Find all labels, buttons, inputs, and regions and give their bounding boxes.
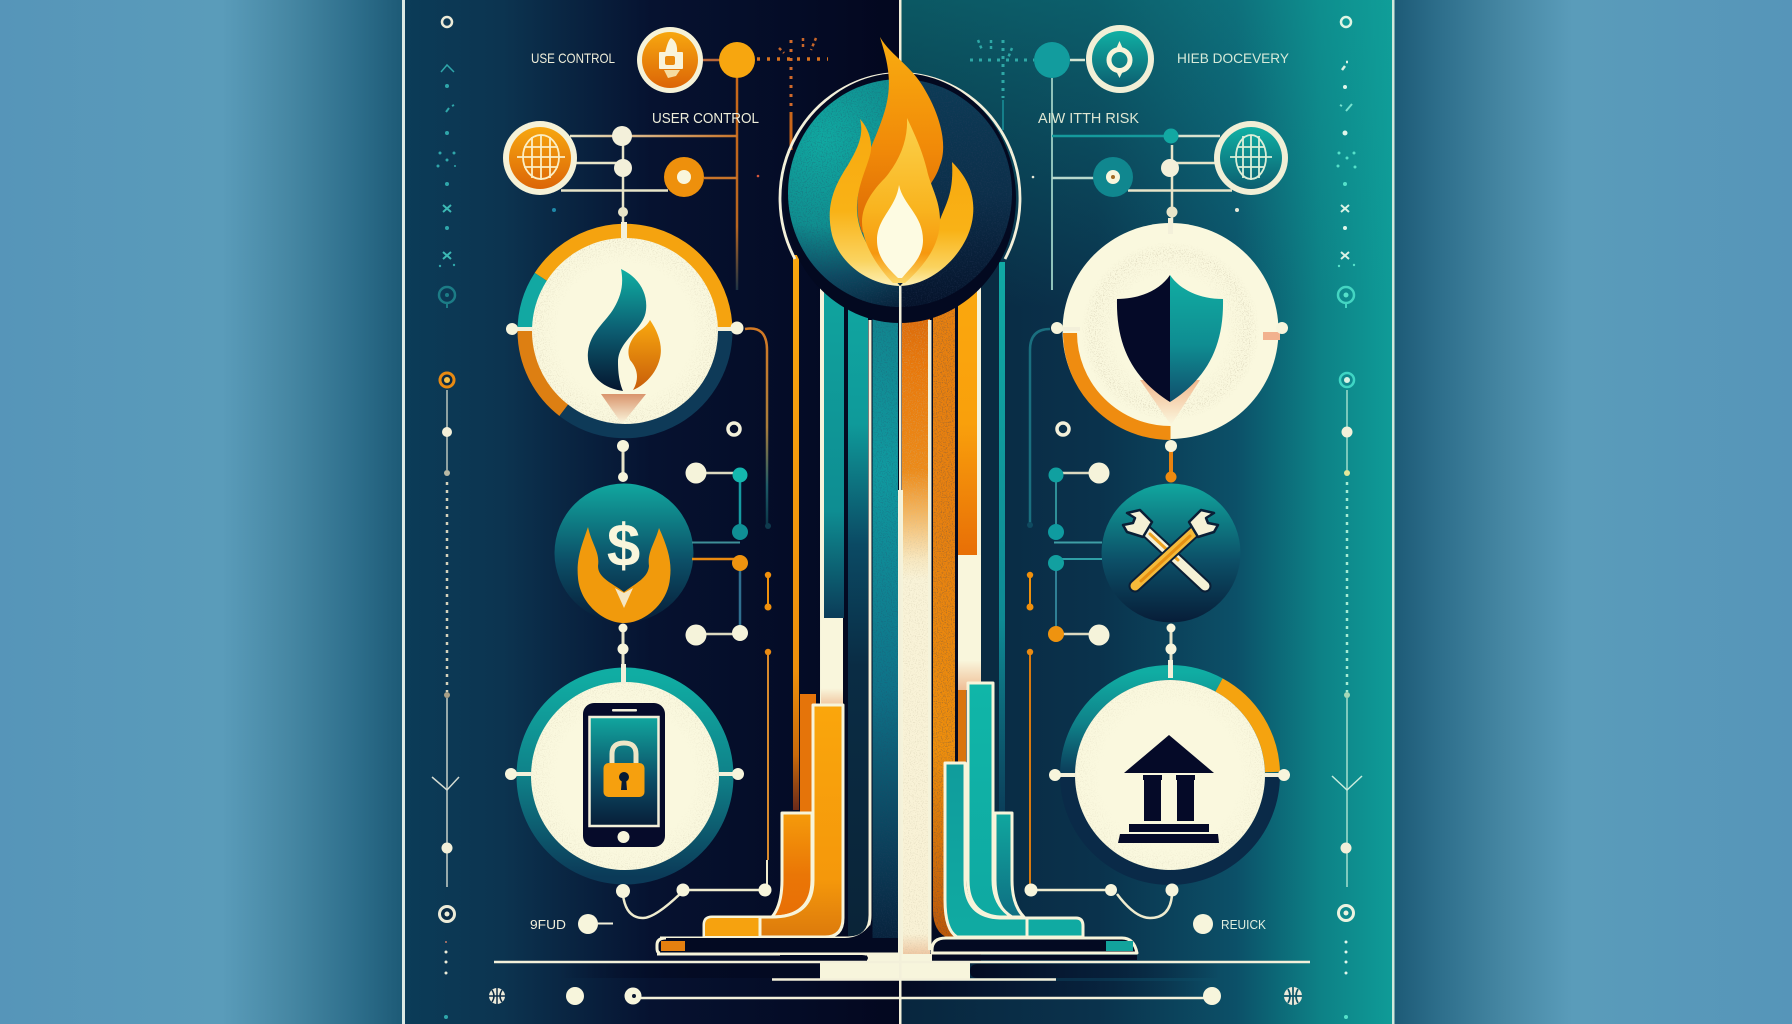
teal bar two xyxy=(848,262,868,936)
amber foot xyxy=(705,918,760,936)
panel: phone lock badge xyxy=(505,664,744,877)
label: bottom right tag: REUICK xyxy=(1221,917,1266,932)
node network right of dollar badge xyxy=(686,423,772,655)
icon: crossed wrenches xyxy=(1123,510,1218,586)
icon: dollar sign: $ xyxy=(607,512,640,579)
connector between flame badge and dollar badge xyxy=(617,440,629,482)
main centre disc xyxy=(780,37,1020,326)
vertical bars rising from the base xyxy=(660,255,1005,962)
stepped base: orange left xyxy=(657,694,898,954)
connector between shield badge and tools badge xyxy=(1165,440,1177,482)
connector below tools badge xyxy=(1166,624,1176,665)
panel: flame badge circle xyxy=(506,222,744,431)
left teal step with wide foot xyxy=(945,763,1083,937)
curved connector under bank badge xyxy=(1024,884,1178,918)
label: use control: USE CONTROL xyxy=(531,50,615,66)
icon: flame hands xyxy=(578,527,671,623)
icon: smartphone with padlock xyxy=(583,703,665,847)
left margin column of small marks xyxy=(432,17,459,1019)
left cream edge line xyxy=(820,270,824,710)
teal bar three xyxy=(872,262,898,954)
label: bottom right tag xyxy=(1193,914,1266,934)
icon: split shield xyxy=(1117,275,1223,402)
cream lower bar xyxy=(821,618,843,708)
panel: central dark and teal poster xyxy=(402,0,1394,1024)
teal thin bar right xyxy=(999,262,1005,812)
label: user control: USER CONTROL xyxy=(652,110,759,127)
label: web discovery: HIEB DOCEVERY xyxy=(1177,50,1290,66)
panel: dollar flame badge xyxy=(554,484,694,623)
icon: top right ring badge xyxy=(1086,25,1154,93)
base bar left xyxy=(657,925,898,953)
peach shadow under shield xyxy=(1140,380,1200,425)
footer nodes and small globes xyxy=(489,987,1302,1005)
icon: bank temple xyxy=(1118,735,1219,843)
label: bottom left tag xyxy=(530,914,613,934)
amber bar xyxy=(958,262,977,555)
small globe right xyxy=(1284,987,1302,1005)
mid orange step xyxy=(772,813,812,917)
cream bar right xyxy=(958,555,981,690)
connector nodes beside left globe xyxy=(552,126,759,217)
icon: top left lock badge xyxy=(637,27,703,93)
connector below dollar badge xyxy=(618,624,628,665)
icon: right globe badge xyxy=(1214,121,1288,195)
panel: shield badge circle xyxy=(1051,218,1288,439)
right margin column of small marks xyxy=(1332,17,1362,1019)
teal bar one xyxy=(824,262,844,618)
panel: bank badge xyxy=(1049,660,1290,878)
node network left of tools badge xyxy=(1026,423,1110,655)
amber node top left xyxy=(719,42,755,78)
curved connector under phone badge xyxy=(616,860,772,918)
base cream pedestal and horizontal lines xyxy=(494,954,1310,998)
small teal step xyxy=(995,813,1024,917)
tall orange step xyxy=(704,705,843,937)
connector nodes beside right globe xyxy=(1032,128,1239,218)
left amber thin bar xyxy=(793,255,799,810)
top right connector network xyxy=(970,40,1232,888)
icon: teal navy flame xyxy=(588,269,661,424)
label: bottom left tag: 9FUD xyxy=(530,917,566,932)
label: risk caption: AIW ITTH RISK xyxy=(1038,111,1139,127)
stepped base: teal right xyxy=(932,683,1137,953)
orange bar fading to cream xyxy=(902,262,930,954)
icon: left globe badge xyxy=(503,121,577,195)
tall teal step xyxy=(968,683,1012,917)
centre vertical divider xyxy=(899,0,902,1024)
orange bar two xyxy=(933,262,955,938)
small globe left xyxy=(489,988,505,1004)
base bar right xyxy=(932,938,1137,953)
panel: crossed tools badge xyxy=(1102,484,1240,622)
teal node top right xyxy=(1034,42,1070,78)
cream outline line wrapping into base xyxy=(660,320,870,938)
icon: central flame xyxy=(830,37,973,286)
back orange step xyxy=(800,694,816,816)
top left connector network xyxy=(561,38,828,860)
